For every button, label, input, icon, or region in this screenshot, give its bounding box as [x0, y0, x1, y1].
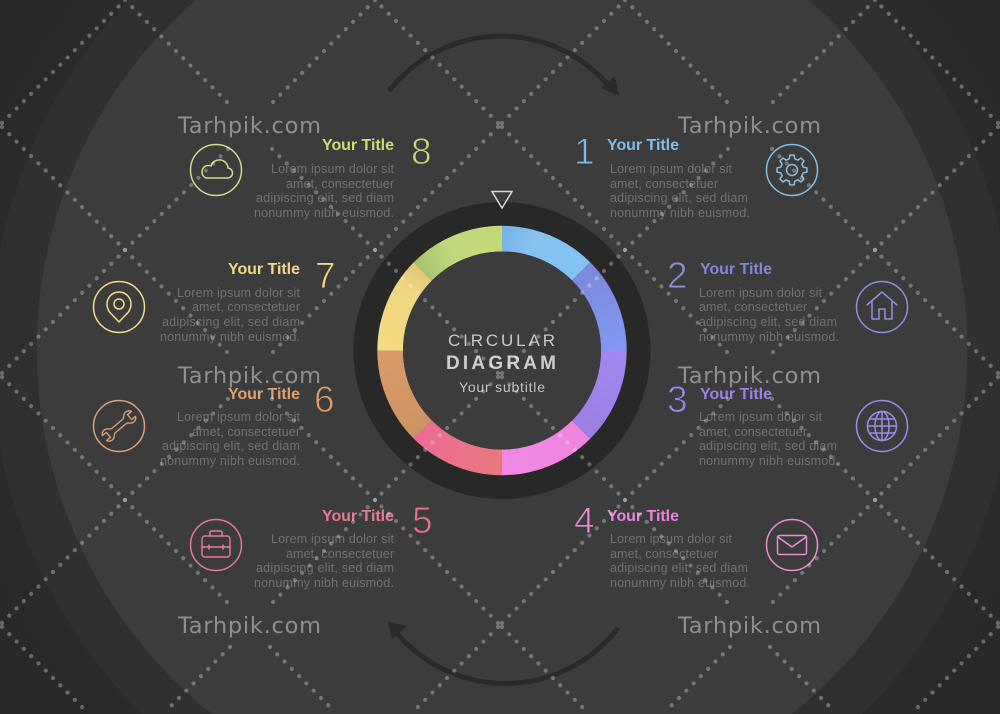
center title — [446, 331, 556, 395]
title: Your Title — [228, 386, 300, 403]
title: Your Title — [228, 261, 300, 278]
watermark text: Tarhpik.com — [677, 363, 821, 389]
center title: CIRCULAR — [448, 331, 555, 350]
title: Your Title — [700, 386, 772, 403]
body text: Lorem ipsum dolor sit — [699, 410, 823, 424]
title: Your Title — [607, 137, 679, 154]
center disc — [403, 252, 601, 450]
body text: Lorem ipsum dolor sit — [177, 286, 301, 300]
body text: amet, consectetuer — [610, 547, 718, 561]
body text: adipiscing elit, sed diam — [699, 439, 837, 453]
body text: amet, consectetuer — [699, 425, 807, 439]
item 4 — [574, 500, 818, 590]
pointer triangle — [492, 192, 512, 208]
title: Your Title — [322, 137, 394, 154]
body text: Lorem ipsum dolor sit — [699, 286, 823, 300]
body text: adipiscing elit, sed diam — [162, 315, 300, 329]
body text: adipiscing elit, sed diam — [162, 439, 300, 453]
body text — [254, 532, 395, 590]
number: 4 — [574, 500, 595, 541]
icon: map pin — [94, 282, 144, 332]
body text: nonummy nibh euismod. — [610, 206, 750, 220]
number: 5 — [412, 500, 433, 541]
body text: Lorem ipsum dolor sit — [610, 162, 733, 176]
arrow: bottom arc — [388, 622, 618, 683]
dark ring — [354, 202, 650, 499]
body text: adipiscing elit, sed diam — [610, 191, 748, 205]
body text: nonummy nibh euismod. — [699, 330, 839, 344]
body text: amet, consectetuer — [286, 547, 394, 561]
segment 8 — [414, 226, 502, 280]
item 5 — [190, 500, 433, 590]
item 7 — [94, 255, 336, 344]
number: 1 — [574, 131, 595, 172]
body text: nonummy nibh euismod. — [254, 576, 394, 590]
body text: nonummy nibh euismod. — [254, 206, 394, 220]
icon: briefcase — [190, 520, 242, 570]
icon: cloud — [190, 144, 242, 196]
body text — [254, 162, 395, 220]
center title: Your subtitle — [459, 379, 545, 395]
watermark text — [177, 113, 821, 639]
segment 1 — [502, 226, 590, 280]
item 3 — [667, 379, 908, 468]
segment 3 — [572, 350, 627, 439]
number: 6 — [314, 379, 335, 420]
number: 7 — [315, 255, 336, 296]
item 8 — [190, 131, 432, 220]
number: 3 — [667, 379, 688, 420]
body text — [699, 410, 839, 468]
item 2 — [667, 255, 908, 344]
body text: Lorem ipsum dolor sit — [271, 532, 395, 546]
segment 5 — [414, 420, 502, 475]
segment 2 — [572, 262, 627, 350]
watermark text: Tarhpik.com — [177, 613, 321, 639]
body text: nonummy nibh euismod. — [160, 454, 300, 468]
body text: amet, consectetuer — [699, 300, 807, 314]
segment 6 — [377, 350, 432, 439]
watermark text: Tarhpik.com — [677, 613, 821, 639]
body text: amet, consectetuer — [192, 425, 300, 439]
body text: Lorem ipsum dolor sit — [177, 410, 301, 424]
icon: envelope — [766, 520, 818, 570]
number: 2 — [667, 255, 688, 296]
number: 8 — [411, 131, 432, 172]
watermark text: Tarhpik.com — [177, 363, 321, 389]
body text: amet, consectetuer — [286, 177, 394, 191]
icon: wrench — [94, 400, 144, 452]
segment 7 — [377, 262, 432, 350]
body text: amet, consectetuer — [192, 300, 300, 314]
body text: adipiscing elit, sed diam — [256, 191, 394, 205]
title: Your Title — [607, 508, 679, 525]
body text — [699, 286, 839, 344]
body text: Lorem ipsum dolor sit — [271, 162, 395, 176]
title: Your Title — [322, 508, 394, 525]
body text: adipiscing elit, sed diam — [610, 561, 748, 575]
item 1 — [574, 131, 818, 220]
body text — [610, 532, 750, 590]
body text: nonummy nibh euismod. — [610, 576, 750, 590]
body text: Lorem ipsum dolor sit — [610, 532, 733, 546]
body text: nonummy nibh euismod. — [160, 330, 300, 344]
segment 4 — [502, 420, 590, 475]
circular diagram wheel — [354, 202, 650, 499]
title: Your Title — [700, 261, 772, 278]
body text: adipiscing elit, sed diam — [699, 315, 837, 329]
body text — [160, 410, 301, 468]
watermark text: Tarhpik.com — [677, 113, 821, 139]
body text — [160, 286, 301, 344]
body text: amet, consectetuer — [610, 177, 718, 191]
icon: globe — [856, 400, 908, 452]
body text — [610, 162, 750, 220]
body text: nonummy nibh euismod. — [699, 454, 839, 468]
icon: house — [856, 282, 908, 332]
body text: adipiscing elit, sed diam — [256, 561, 394, 575]
icon: gear — [766, 144, 818, 196]
item 6 — [94, 379, 335, 468]
arrow: top clockwise arc — [389, 36, 619, 96]
watermark text: Tarhpik.com — [177, 113, 321, 139]
center title: DIAGRAM — [446, 353, 556, 374]
